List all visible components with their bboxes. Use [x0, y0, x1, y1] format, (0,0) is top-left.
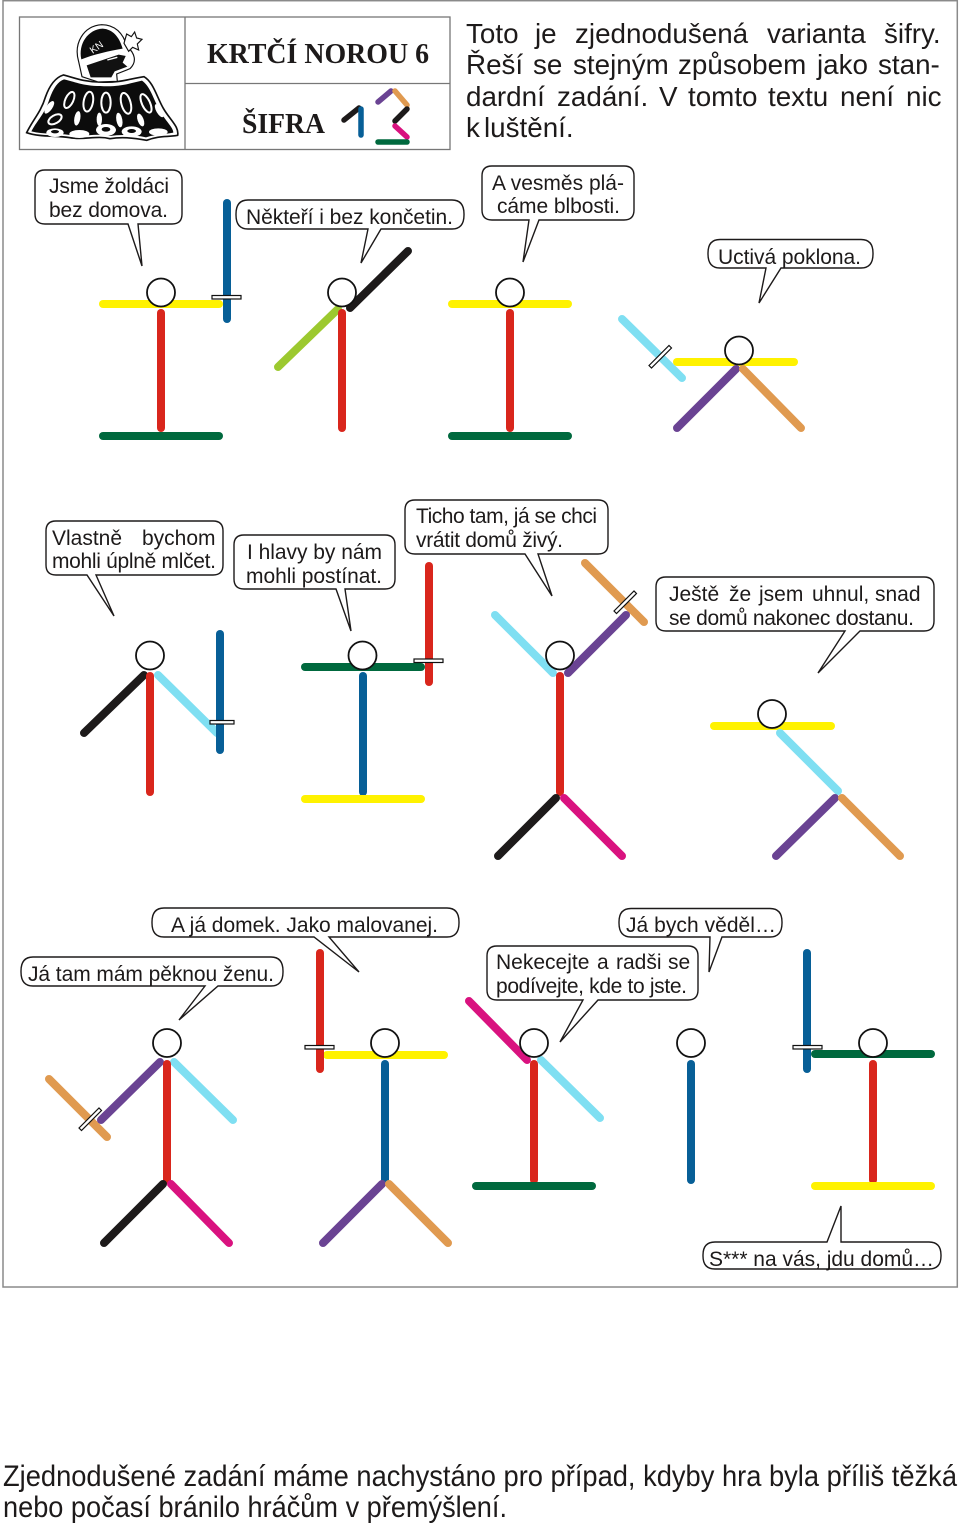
- text block: introduction: se: [533, 49, 570, 80]
- text block: footer note: nebo počasí bránilo hráčům v přemýšlení.: [3, 1491, 507, 1524]
- speech bubble 8: že: [729, 583, 757, 606]
- icon: mole soldier logo: [27, 25, 178, 140]
- speech bubble 10: Já tam mám pěknou ženu.: [28, 963, 274, 986]
- figure 7: [495, 563, 644, 856]
- speech bubble 11: se: [668, 951, 690, 974]
- speech bubble 3: A vesměs plá-: [492, 172, 624, 195]
- speech bubble 4: Uctivá poklona.: [718, 246, 861, 269]
- text block: introduction: není: [840, 81, 902, 112]
- speech bubble 7: Ticho tam, já se chci: [416, 505, 597, 528]
- speech bubble 7: [405, 500, 608, 596]
- text block: introduction: nic: [906, 81, 942, 112]
- speech bubble 7: vrátit domů živý.: [416, 529, 563, 552]
- figure 2: [278, 251, 408, 428]
- speech bubble 8: snad: [875, 583, 921, 606]
- heading: subtitle: ŠIFRA: [242, 109, 326, 140]
- speech bubble 13: [703, 1206, 941, 1271]
- icon: mole soldier logo: KN: [88, 39, 106, 56]
- speech bubble 5: [46, 521, 223, 616]
- speech bubble 10: [21, 957, 283, 1020]
- text block: introduction: zadání.: [557, 81, 656, 112]
- text block: introduction: V: [659, 81, 685, 112]
- text block: introduction: tomto: [688, 81, 765, 112]
- speech bubble 1: Jsme žoldáci: [49, 175, 169, 198]
- figure 8: [714, 700, 900, 856]
- text block: introduction: stan-: [878, 49, 940, 80]
- figure 4: [622, 319, 801, 428]
- speech bubble 2: Někteří i bez končetin.: [246, 206, 453, 229]
- figure 3: [452, 278, 568, 436]
- speech bubble 6: [234, 535, 395, 631]
- text block: introduction: dardní: [466, 81, 553, 112]
- speech bubble 4: [708, 240, 873, 303]
- text block: introduction: Toto: [466, 18, 526, 49]
- text block: introduction: luštění.: [484, 112, 574, 143]
- icon: number 13 made of limbs: [344, 91, 407, 142]
- text block: introduction: způsobem: [678, 49, 814, 80]
- speech bubble 5: Vlastně: [52, 527, 128, 550]
- figure 6: [305, 566, 443, 799]
- speech bubble 5: bychom: [142, 527, 216, 550]
- figure 10: [305, 953, 448, 1243]
- speech bubble 6: mohli postínat.: [246, 565, 382, 588]
- figure 5: [84, 634, 234, 792]
- speech bubble 3: cáme blbosti.: [497, 195, 620, 218]
- speech bubble 1: bez domova.: [49, 199, 168, 222]
- speech bubble 8: Ještě: [669, 583, 725, 606]
- speech bubble 5: mohli úplně mlčet.: [52, 550, 216, 573]
- speech bubble 12: [619, 908, 782, 972]
- speech bubble 9: [152, 908, 459, 972]
- speech bubble 12: Já bych věděl…: [626, 914, 776, 937]
- text block: footer note: [3, 1460, 957, 1524]
- text block: introduction: je: [534, 18, 564, 49]
- text block: introduction: textu: [768, 81, 836, 112]
- text block: introduction: zjednodušená: [575, 18, 756, 49]
- speech bubble 8: se domů nakonec dostanu.: [669, 607, 914, 630]
- speech bubble 11: Nekecejte: [496, 951, 595, 974]
- text block: introduction: stejným: [573, 49, 676, 80]
- figure 13: [793, 953, 931, 1186]
- text block: introduction: šifry.: [884, 18, 941, 49]
- panel: header box: [20, 17, 450, 150]
- speech bubble 11: radši: [616, 951, 667, 974]
- speech bubble 11: [487, 946, 698, 1042]
- speech bubble 3: [482, 166, 634, 262]
- speech bubble 13: S*** na vás, jdu domů…: [709, 1248, 934, 1271]
- speech bubble 1: [35, 170, 182, 266]
- speech bubble 9: A já domek. Jako malovanej.: [171, 914, 438, 937]
- figure 1: [103, 203, 241, 436]
- text block: introduction: Řeší: [466, 49, 531, 80]
- speech bubble 11: podívejte, kde to jste.: [496, 975, 687, 998]
- speech bubble 11: a: [597, 951, 615, 974]
- heading: title: KRTČÍ NOROU 6: [207, 39, 429, 70]
- text block: introduction: varianta: [767, 18, 874, 49]
- speech bubble 8: uhnul,: [812, 583, 875, 606]
- figure 12: [677, 1029, 705, 1180]
- text block: introduction: jako: [816, 49, 876, 80]
- speech bubble 2: [236, 200, 464, 263]
- figure 11: [469, 1001, 600, 1186]
- speech bubble 8: jsem: [758, 583, 809, 606]
- text block: introduction: k: [466, 112, 488, 143]
- speech bubble 6: I hlavy by nám: [247, 541, 382, 564]
- figure 9: [49, 1029, 233, 1243]
- speech bubble 8: [656, 577, 934, 673]
